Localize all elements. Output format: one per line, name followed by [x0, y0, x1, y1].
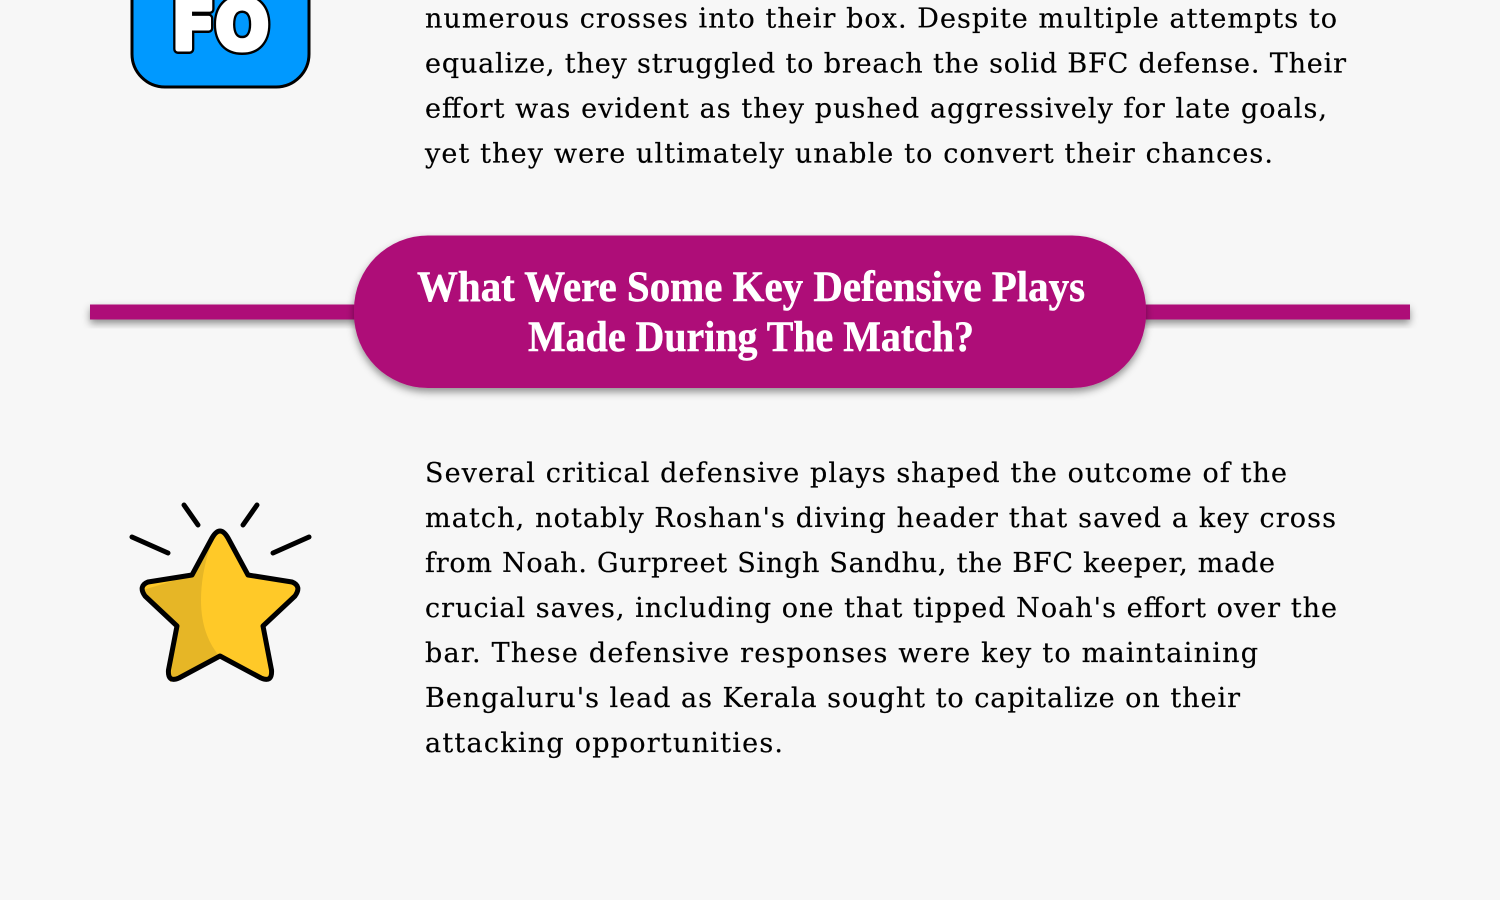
heading pill: Made During The Match?	[528, 314, 974, 361]
text block: defensive plays: Several critical defensive plays shaped the outcome of the	[425, 458, 1287, 489]
text block: defensive plays: attacking opportunities.	[425, 728, 783, 759]
text block: defensive plays	[425, 458, 1337, 759]
text block: attacking effort: effort was evident as they pushed aggressively for late goals,	[425, 94, 1327, 124]
heading pill	[354, 236, 1146, 388]
text block: defensive plays: from Noah. Gurpreet Singh Sandhu, the BFC keeper, made	[425, 548, 1275, 579]
text block: attacking effort: equalize, they struggled to breach the solid BFC defense. Their	[425, 48, 1346, 80]
text block: defensive plays: crucial saves, including one that tipped Noah's effort over the	[425, 593, 1337, 624]
text block: defensive plays: match, notably Roshan's diving header that saved a key cross	[425, 503, 1336, 534]
text block: attacking effort	[424, 4, 1346, 170]
text block: attacking effort: numerous crosses into their box. Despite multiple attempts to	[425, 4, 1337, 34]
text block: defensive plays: bar. These defensive responses were key to maintaining	[425, 638, 1258, 669]
text block: defensive plays: Bengaluru's lead as Kerala sought to capitalize on their	[425, 683, 1240, 714]
banner rule	[90, 304, 1410, 320]
text block: attacking effort: yet they were ultimately unable to convert their chances.	[424, 138, 1273, 170]
heading pill: What Were Some Key Defensive Plays	[417, 264, 1085, 311]
section heading banner	[90, 236, 1410, 388]
icon: info badge	[132, 0, 309, 87]
icon: shining star	[132, 505, 309, 682]
